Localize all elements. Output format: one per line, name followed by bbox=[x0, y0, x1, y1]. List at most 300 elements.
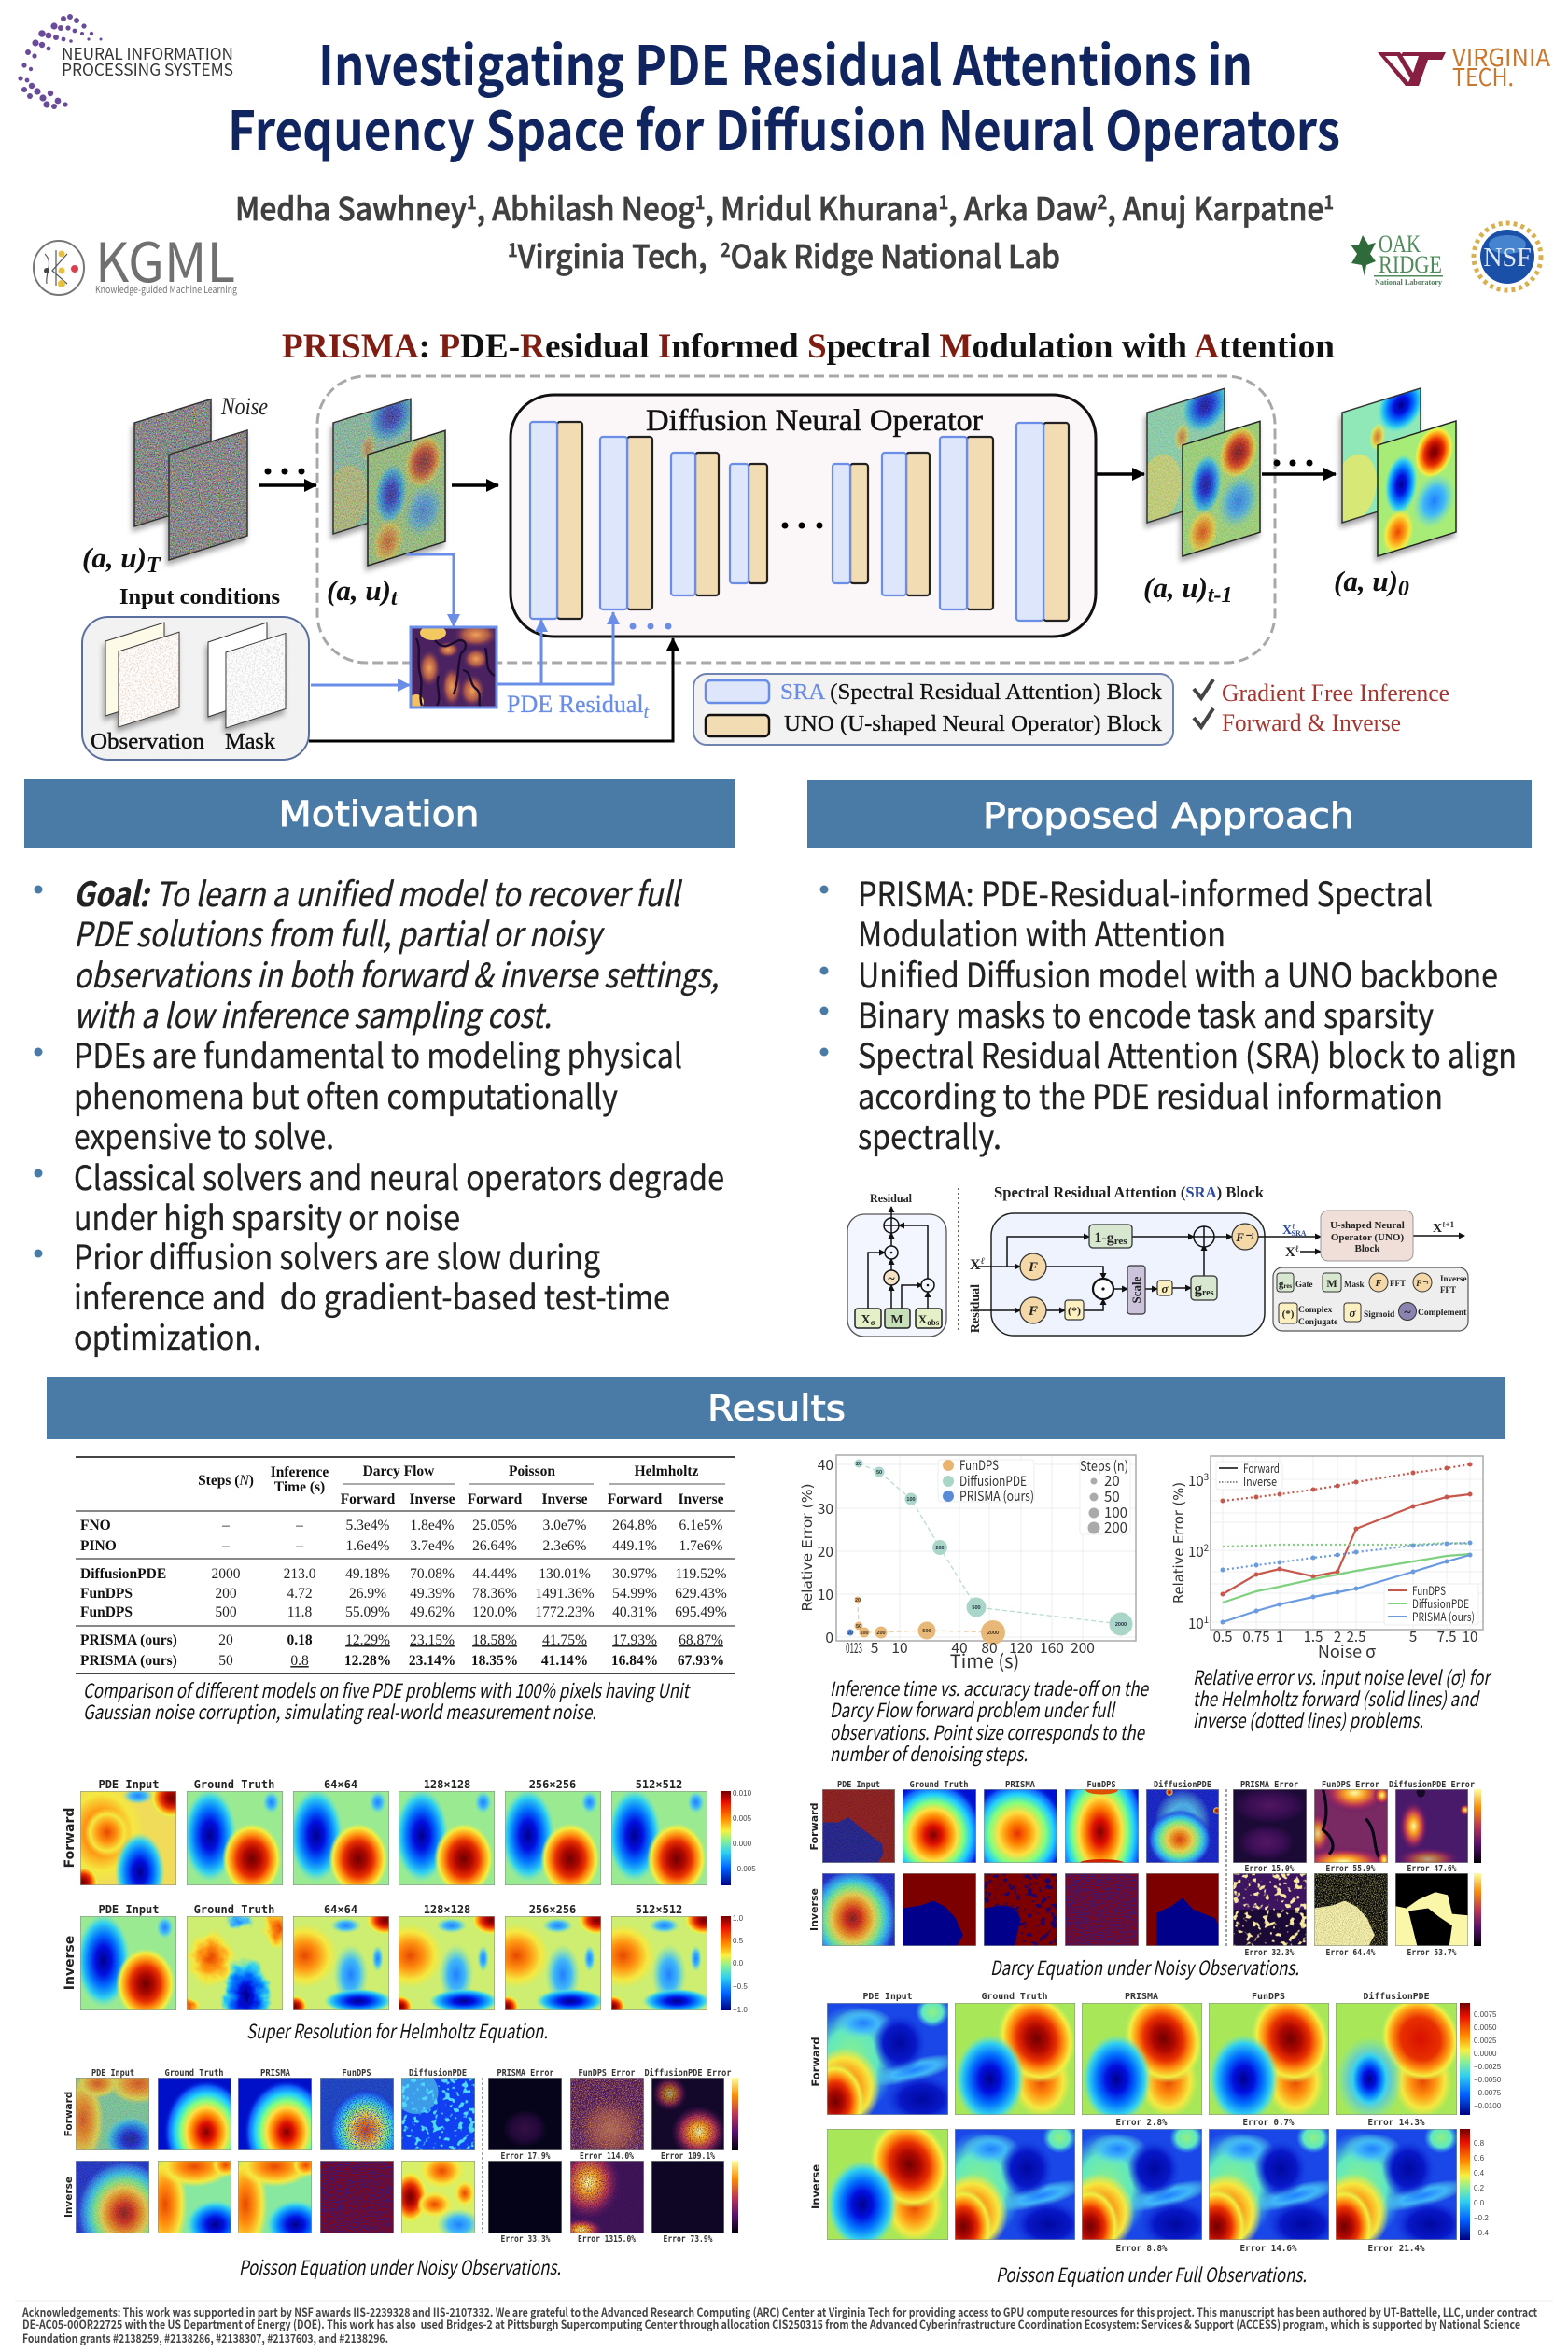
series: FunDPS: 500 bbox=[922, 1629, 931, 1634]
panel: input conditions bbox=[82, 617, 309, 760]
colorbars bbox=[1460, 2003, 1502, 2240]
logo: Oak Ridge National Laboratory: OAK bbox=[1379, 231, 1421, 258]
legend: steps bbox=[1080, 1456, 1130, 1537]
affiliations: 1 bbox=[508, 235, 518, 262]
column titles: Ground Truth bbox=[164, 2068, 224, 2079]
dashed sampling loop bbox=[317, 376, 1275, 663]
legend: SRA symbols: Complement bbox=[1418, 1309, 1467, 1318]
arrow: xt to operator bbox=[452, 483, 498, 487]
checklist: features bbox=[1194, 679, 1449, 736]
row: PINO: 26.64% bbox=[472, 1538, 517, 1554]
label: (a,u)0: (a, u) bbox=[1334, 565, 1398, 597]
panel: SRA block: 1-g bbox=[1094, 1230, 1114, 1246]
row: PINO: 3.7e4% bbox=[411, 1538, 455, 1554]
text: proposed approach bullets: spectrally. bbox=[858, 1111, 1001, 1159]
label: (a,u)T: T bbox=[147, 553, 161, 578]
acknowledgements: Foundation grants #2138259, #2138286, #2138307, #2137603, and #2138296. bbox=[22, 2329, 388, 2346]
sheets: mask bbox=[208, 623, 286, 728]
legend: SRA symbols: Mask bbox=[1344, 1280, 1365, 1289]
text: motivation bullets: Prior diffusion solvers are slow during bbox=[74, 1231, 600, 1280]
text: motivation bullets: under high sparsity or noise bbox=[74, 1192, 460, 1240]
arrow: noise to xt bbox=[259, 469, 316, 485]
axis ticks: 0.5 bbox=[1213, 1627, 1232, 1646]
legend: SRA symbols: ~ bbox=[1404, 1306, 1411, 1320]
axis tick labels: 200 bbox=[1071, 1637, 1095, 1658]
error labels: Error 2.8% bbox=[1116, 2118, 1167, 2128]
column titles: PDE Input bbox=[862, 1992, 913, 2002]
axis ticks: 10 bbox=[1188, 1614, 1204, 1633]
series: DiffusionPDE: 200 bbox=[935, 1546, 945, 1551]
label: PDE Residual t: PDE Residual bbox=[507, 691, 644, 718]
legend: methods: DiffusionPDE bbox=[1412, 1594, 1469, 1612]
panel: residual computation: Residual bbox=[870, 1191, 912, 1205]
table: model comparison bbox=[76, 1457, 735, 1673]
row: FNO: 6.1e5% bbox=[679, 1518, 723, 1533]
column titles: PRISMA Error bbox=[1240, 1780, 1298, 1790]
noise sheets bbox=[134, 399, 247, 560]
panel: SRA block bbox=[978, 1213, 1265, 1336]
colorbars: −0.005 bbox=[733, 1865, 756, 1873]
heading: PRISMA full name: PRISMA: PDE-Residual Informed Spectral Modulation with Attention bbox=[282, 327, 1335, 365]
heatmaps inverse bbox=[807, 1868, 1468, 1969]
column titles bbox=[862, 1991, 1430, 2002]
colorbars: −0.0100 bbox=[1474, 2102, 1502, 2110]
label: (a,u)t-1: (a, u) bbox=[1143, 571, 1208, 604]
row: DiffusionPDE: 70.08% bbox=[410, 1566, 455, 1582]
panel: residual computation: X bbox=[918, 1312, 927, 1326]
legend: methods: DiffusionPDE bbox=[959, 1471, 1027, 1491]
legend: SRA symbols: σ bbox=[1349, 1306, 1356, 1320]
table header: Steps (N) bbox=[198, 1473, 254, 1489]
label: PDE Residual t: t bbox=[644, 703, 650, 722]
column titles: DiffusionPDE Error bbox=[1389, 1779, 1475, 1790]
series: FunDPS: 100 bbox=[860, 1631, 869, 1636]
logo: NeurIPS: NEURAL INFORMATION bbox=[62, 42, 233, 65]
caption: noise level: the Helmholtz forward (solid lines) and bbox=[1193, 1685, 1480, 1713]
axis tick labels: 10 bbox=[891, 1637, 908, 1658]
caption: inference trade-off bbox=[830, 1674, 1150, 1768]
panel: SRA block: g bbox=[1194, 1280, 1202, 1297]
sheets: noisy state t bbox=[324, 382, 445, 570]
row: PRISMA 20 bbox=[80, 1632, 723, 1648]
colorbars bbox=[1474, 1789, 1481, 1946]
legend: methods: FunDPS bbox=[1412, 1581, 1446, 1599]
axis ticks: 1 bbox=[1276, 1627, 1283, 1646]
axis label: time: Time (s) bbox=[950, 1646, 1019, 1673]
column titles: 256×256 bbox=[529, 1903, 576, 1916]
authors: , Abhilash Neog bbox=[477, 184, 695, 230]
column titles: FunDPS bbox=[1086, 1780, 1116, 1790]
colorbars: 0.000 bbox=[733, 1840, 752, 1848]
caption: inference trade-off: number of denoising steps. bbox=[830, 1740, 1028, 1768]
legend: block types bbox=[693, 674, 1173, 745]
text: proposed approach bullets: Binary masks to encode task and sparsity bbox=[858, 989, 1434, 1038]
axis ticks: 10 bbox=[1188, 1542, 1204, 1561]
row: DiffusionPDE bbox=[80, 1566, 727, 1582]
row: FunDPS 200: 54.99% bbox=[612, 1586, 657, 1602]
text: motivation bullets: PDE solutions from full, partial or noisy bbox=[74, 908, 606, 957]
table header: Forward bbox=[341, 1491, 396, 1507]
text: motivation bullets: inference and do gradient-based test-time bbox=[74, 1271, 670, 1320]
panel: UNO block: ℓ bbox=[1292, 1222, 1295, 1231]
row: DiffusionPDE: 44.44% bbox=[472, 1566, 517, 1582]
legend: line style: Forward bbox=[1243, 1459, 1280, 1477]
acknowledgements bbox=[15, 2301, 1553, 2346]
row: FunDPS 200: 26.9% bbox=[349, 1586, 386, 1602]
table header bbox=[198, 1463, 724, 1507]
sheets: observation bbox=[105, 623, 179, 727]
caption: noise level: inverse (dotted lines) problems. bbox=[1193, 1706, 1423, 1734]
caption: Poisson noisy: Poisson Equation under Noisy Observations. bbox=[239, 2253, 561, 2281]
panel: SRA block: Scale bbox=[1129, 1276, 1143, 1303]
series: PRISMA bbox=[847, 1630, 853, 1636]
table header: Forward bbox=[608, 1491, 663, 1507]
row: DiffusionPDE: 130.01% bbox=[539, 1566, 591, 1582]
axis tick labels: 120 bbox=[1009, 1637, 1033, 1658]
text: motivation bullets: PDEs are fundamental to modeling physical bbox=[74, 1029, 682, 1078]
text: motivation bullets: with a low inference sampling cost. bbox=[74, 989, 552, 1038]
colorbars: 0.6 bbox=[1474, 2154, 1485, 2163]
column titles bbox=[91, 2067, 732, 2079]
panel: UNO block: X bbox=[1433, 1222, 1442, 1236]
axis tick labels: 40 bbox=[951, 1637, 968, 1658]
panel: residual computation: ~ bbox=[888, 1272, 895, 1286]
row: FunDPS 500: 500 bbox=[215, 1604, 237, 1620]
label: (a,u)t: (a, u) bbox=[327, 574, 391, 607]
axis ticks: 2 bbox=[1204, 1540, 1210, 1554]
text: motivation bullets: observations in both forward & inverse settings, bbox=[74, 949, 719, 998]
label: Input conditions: Input conditions bbox=[119, 585, 280, 609]
colorbars: 0.010 bbox=[733, 1789, 752, 1798]
row: PRISMA 50: 0.8 bbox=[290, 1653, 309, 1669]
column titles: 128×128 bbox=[424, 1778, 470, 1791]
logo: NeurIPS: PROCESSING SYSTEMS bbox=[62, 58, 233, 81]
series: DiffusionPDE: 500 bbox=[972, 1605, 981, 1611]
legend: methods: FunDPS bbox=[959, 1455, 999, 1475]
column titles: 512×512 bbox=[636, 1903, 682, 1916]
authors: 1 bbox=[467, 188, 477, 215]
chart: error vs noise bbox=[1170, 1456, 1483, 1663]
series: FunDPS: 2000 bbox=[987, 1631, 999, 1636]
table header: Time (s) bbox=[274, 1479, 325, 1495]
colorbars bbox=[721, 1789, 756, 2014]
table header: Inverse bbox=[409, 1491, 455, 1507]
column titles bbox=[98, 1778, 682, 1916]
row: FunDPS 500: 120.0% bbox=[472, 1604, 517, 1620]
row: FNO: 25.05% bbox=[472, 1518, 517, 1533]
row: DiffusionPDE: 119.52% bbox=[676, 1566, 727, 1582]
text: proposed approach bullets: Unified Diffusion model with a UNO backbone bbox=[858, 949, 1498, 998]
colorbars: 0.8 bbox=[1474, 2139, 1485, 2148]
row labels: Forward bbox=[809, 2037, 822, 2087]
axis label: relative error: Relative Error (%) bbox=[799, 1484, 816, 1611]
legend: line style bbox=[1216, 1459, 1282, 1490]
table header: Inverse bbox=[678, 1491, 724, 1507]
row: FunDPS 200: 1491.36% bbox=[535, 1586, 595, 1602]
row: FunDPS 500: 695.49% bbox=[675, 1604, 727, 1620]
row: FunDPS 500: 11.8 bbox=[287, 1604, 313, 1620]
column titles: DiffusionPDE bbox=[409, 2067, 467, 2079]
row: PINO: 449.1% bbox=[612, 1538, 657, 1554]
row labels: Inverse bbox=[63, 2177, 75, 2218]
legend: steps: 50 bbox=[1104, 1487, 1120, 1506]
text: motivation bullets bbox=[34, 868, 724, 1360]
row: FNO: FNO bbox=[80, 1518, 111, 1533]
column titles: 64×64 bbox=[324, 1903, 357, 1916]
axis tick labels: 5 bbox=[871, 1637, 878, 1658]
authors: , Mridul Khurana bbox=[705, 184, 939, 230]
heatmaps forward bbox=[822, 1758, 1471, 1906]
row: PRISMA 20: 41.75% bbox=[542, 1632, 587, 1648]
legend: SRA symbols: M bbox=[1326, 1277, 1337, 1290]
legend: SRA symbols: res bbox=[1283, 1282, 1292, 1290]
series: PRISMA bbox=[1221, 1540, 1473, 1624]
series: FunDPS: 50 bbox=[856, 1624, 861, 1630]
axis ticks: 0.75 bbox=[1242, 1627, 1270, 1646]
panel: residual computation bbox=[847, 1191, 946, 1337]
series: FunDPS bbox=[855, 1596, 1005, 1645]
axis ticks: 10 bbox=[1188, 1471, 1204, 1491]
text: motivation bullets: Goal: To learn a unified model to recover full bbox=[74, 868, 682, 917]
caption: Darcy: Darcy Equation under Noisy Observations. bbox=[990, 1953, 1299, 1981]
label: Noise: Noise bbox=[220, 393, 268, 420]
error labels: Error 109.1% bbox=[661, 2151, 715, 2162]
row: PRISMA 20: PRISMA (ours) bbox=[80, 1632, 177, 1648]
authors: 1 bbox=[939, 188, 948, 215]
colorbars: −0.0050 bbox=[1474, 2076, 1502, 2084]
caption: noise level bbox=[1193, 1663, 1492, 1734]
column titles: PDE Input bbox=[837, 1780, 880, 1790]
text: motivation bullets: phenomena but often computationally bbox=[74, 1071, 618, 1119]
axis ticks: 2.5 bbox=[1347, 1627, 1365, 1646]
authors: Medha Sawhney bbox=[235, 184, 483, 230]
panel: residual computation: σ bbox=[871, 1318, 875, 1327]
legend: steps: 200 bbox=[1104, 1518, 1127, 1537]
row: FunDPS 500: 40.31% bbox=[612, 1604, 657, 1620]
row: PINO: – bbox=[295, 1538, 303, 1554]
row: DiffusionPDE: 49.18% bbox=[345, 1566, 390, 1582]
series: FunDPS: 20 bbox=[855, 1598, 861, 1603]
column titles: Ground Truth bbox=[194, 1903, 274, 1916]
row: PRISMA 20: 23.15% bbox=[410, 1632, 455, 1648]
title bbox=[228, 22, 1340, 166]
panel: UNO block: ℓ+1 bbox=[1442, 1220, 1455, 1229]
row: PRISMA 20: 18.58% bbox=[472, 1632, 517, 1648]
row: FunDPS 500: 49.62% bbox=[410, 1604, 455, 1620]
colorbars: 0.0000 bbox=[1474, 2050, 1497, 2058]
text: proposed approach bullets: according to the PDE residual information bbox=[858, 1071, 1443, 1119]
panel: diffusion neural operator bbox=[511, 395, 1096, 637]
panel: residual computation: obs bbox=[927, 1318, 940, 1327]
text: proposed approach bullets bbox=[819, 868, 1517, 1159]
colorbars: 0.2 bbox=[1474, 2184, 1485, 2192]
error labels: Error 0.7% bbox=[1243, 2118, 1294, 2128]
row: FNO: 5.3e4% bbox=[346, 1518, 390, 1533]
header: Proposed Approach: Proposed Approach bbox=[983, 796, 1354, 836]
row: PINO: – bbox=[221, 1538, 230, 1554]
logo: Oak Ridge National Laboratory: National Laboratory bbox=[1375, 278, 1442, 287]
authors: 1 bbox=[695, 188, 705, 215]
row: DiffusionPDE: 30.97% bbox=[612, 1566, 657, 1582]
table header: Darcy Flow bbox=[363, 1463, 435, 1479]
axis label: noise: Noise σ bbox=[1318, 1639, 1376, 1663]
legend: line style: Inverse bbox=[1243, 1472, 1277, 1490]
axis ticks: 1.5 bbox=[1304, 1627, 1323, 1646]
header: Proposed Approach bbox=[807, 780, 1532, 848]
colorbars: 0.0050 bbox=[1474, 2023, 1497, 2032]
row: FunDPS 200 bbox=[80, 1586, 727, 1602]
heatmaps inverse bbox=[77, 1905, 722, 2033]
legend: SRA symbols: Gate bbox=[1295, 1280, 1312, 1289]
row: PRISMA 20: 68.87% bbox=[679, 1632, 723, 1648]
row: PRISMA 20: 0.18 bbox=[287, 1632, 313, 1648]
panel: UNO block: Operator (UNO) bbox=[1331, 1232, 1404, 1243]
text: motivation bullets: Classical solvers and neural operators degrade bbox=[74, 1152, 724, 1200]
colorbars: 0.4 bbox=[1474, 2169, 1485, 2177]
caption: table bbox=[83, 1676, 691, 1726]
label: Residual input: Residual bbox=[969, 1284, 983, 1333]
row labels: Inverse bbox=[808, 1888, 820, 1931]
series: DiffusionPDE: 100 bbox=[906, 1497, 916, 1503]
row: FunDPS 200: 49.39% bbox=[410, 1586, 455, 1602]
header: Results bbox=[47, 1377, 1505, 1439]
affiliations: 2 bbox=[721, 235, 731, 262]
legend: methods bbox=[1384, 1581, 1478, 1625]
legend: methods: PRISMA (ours) bbox=[959, 1486, 1034, 1505]
panel: UNO block: ℓ bbox=[1295, 1244, 1299, 1254]
row: FNO: 1.8e4% bbox=[411, 1518, 455, 1533]
row: DiffusionPDE: 2000 bbox=[211, 1566, 241, 1582]
legend: SRA symbols: (*) bbox=[1282, 1309, 1295, 1320]
column titles: FunDPS Error bbox=[579, 2068, 635, 2079]
row labels: Forward bbox=[63, 1808, 77, 1868]
error labels: Error 73.9% bbox=[663, 2234, 713, 2245]
row: PRISMA 50: 41.14% bbox=[541, 1653, 588, 1669]
text: motivation bullets: optimization. bbox=[74, 1311, 261, 1360]
text: proposed approach bullets: Modulation with Attention bbox=[858, 908, 1225, 957]
error labels: Error 33.3% bbox=[500, 2234, 551, 2245]
arrow: operator to x t-1 bbox=[1097, 472, 1144, 476]
heatmaps forward bbox=[63, 2063, 726, 2185]
text: proposed approach bullets: PRISMA: PDE-Residual-informed Spectral bbox=[858, 868, 1433, 917]
error labels: Error 21.4% bbox=[1368, 2244, 1424, 2254]
row: PINO bbox=[80, 1538, 723, 1554]
title: Investigating PDE Residual Attentions in bbox=[318, 22, 1253, 101]
legend: block types: SRA (Spectral Residual Attention) Block bbox=[780, 679, 1163, 705]
row: FNO bbox=[80, 1518, 723, 1533]
table header: Inference bbox=[271, 1464, 329, 1480]
error labels: Error 14.6% bbox=[1239, 2244, 1297, 2254]
row: DiffusionPDE: DiffusionPDE bbox=[80, 1566, 166, 1582]
colorbars: −0.0075 bbox=[1474, 2089, 1502, 2097]
image: residual map bbox=[409, 622, 498, 709]
caption: Poisson full: Poisson Equation under Full Observations. bbox=[996, 2261, 1307, 2289]
colorbars: −1.0 bbox=[733, 2006, 748, 2014]
series: FunDPS bbox=[1221, 1462, 1473, 1596]
row: FunDPS 200: 629.43% bbox=[675, 1586, 727, 1602]
row labels: Inverse bbox=[809, 2164, 822, 2209]
table header: Forward bbox=[468, 1491, 523, 1507]
error labels: Error 53.7% bbox=[1407, 1948, 1456, 1958]
row: PRISMA 50: 23.14% bbox=[409, 1653, 455, 1669]
header: Results: Results bbox=[707, 1389, 846, 1429]
series: PRISMA: 20 bbox=[847, 1631, 853, 1636]
dashed separator bbox=[1225, 1789, 1227, 1946]
arrow: t-1 to 0 bbox=[1262, 459, 1336, 474]
error labels: Error 17.9% bbox=[500, 2151, 551, 2162]
legend: SRA symbols: F bbox=[1375, 1279, 1382, 1289]
axis tick labels: 0 bbox=[825, 1627, 833, 1647]
row labels: Inverse bbox=[63, 1936, 77, 1990]
panel: UNO block: X bbox=[1285, 1245, 1295, 1260]
row: FunDPS 200: 78.36% bbox=[472, 1586, 517, 1602]
heatmaps forward bbox=[806, 1987, 1469, 2139]
row: FNO: 3.0e7% bbox=[543, 1518, 587, 1533]
chart: inference time vs error bbox=[799, 1454, 1136, 1673]
legend: steps: 20 bbox=[1104, 1471, 1120, 1491]
legend: methods bbox=[938, 1455, 1034, 1505]
figure: Poisson full observations bbox=[806, 1987, 1502, 2264]
heatmaps inverse bbox=[76, 2145, 724, 2267]
error labels: Error 14.3% bbox=[1368, 2118, 1424, 2128]
panel: UNO block: SRA bbox=[1292, 1229, 1307, 1238]
panel: SRA block: F⁻¹ bbox=[1235, 1230, 1254, 1244]
row: FNO: 264.8% bbox=[612, 1518, 657, 1533]
logo: NSF bbox=[1474, 223, 1541, 290]
row: PRISMA 20: 17.93% bbox=[612, 1632, 657, 1648]
error labels: Error 8.8% bbox=[1116, 2244, 1167, 2254]
colorbars: 0.0075 bbox=[1474, 2010, 1497, 2019]
panel: UNO block: U-shaped Neural bbox=[1330, 1220, 1405, 1231]
column titles: FunDPS bbox=[342, 2068, 371, 2079]
table header: Poisson bbox=[509, 1463, 555, 1479]
row labels bbox=[63, 2092, 75, 2218]
axis ticks: 3 bbox=[1204, 1469, 1209, 1483]
legend: SRA symbols: FFT bbox=[1390, 1279, 1406, 1288]
column titles: PDE Input bbox=[91, 2068, 134, 2079]
heatmaps forward bbox=[59, 1777, 707, 1911]
row: FunDPS 500: FunDPS bbox=[80, 1604, 133, 1620]
series: DiffusionPDE: 20 bbox=[856, 1462, 861, 1467]
logo: Oak Ridge National Laboratory: RIDGE bbox=[1379, 251, 1442, 278]
series: DiffusionPDE: 2000 bbox=[1115, 1622, 1127, 1628]
panel: SRA block: (*) bbox=[1068, 1304, 1081, 1317]
logo: Virginia Tech: VIRGINIA bbox=[1452, 39, 1550, 74]
error labels: Error 1315.0% bbox=[578, 2234, 636, 2245]
column titles: PDE Input bbox=[98, 1778, 160, 1791]
legend: SRA symbols: F⁻¹ bbox=[1415, 1279, 1429, 1288]
panel: residual computation: M bbox=[890, 1313, 903, 1327]
column titles: 256×256 bbox=[529, 1778, 576, 1791]
colorbars: −0.4 bbox=[1474, 2229, 1489, 2237]
row: FunDPS 500 bbox=[80, 1604, 727, 1620]
legend: SRA symbols: Conjugate bbox=[1298, 1318, 1337, 1327]
logo: KGML bbox=[34, 219, 237, 298]
caption: table: Gaussian noise corruption, simulating real-world measurement noise. bbox=[83, 1698, 596, 1726]
label: (a,u)t-1: t-1 bbox=[1208, 583, 1233, 608]
column titles: FunDPS bbox=[1252, 1992, 1285, 2002]
logo: NeurIPS bbox=[18, 14, 233, 109]
row: PINO: 2.3e6% bbox=[543, 1538, 587, 1554]
row: PRISMA 50: 67.93% bbox=[678, 1653, 724, 1669]
logo: KGML: KGML bbox=[95, 219, 235, 298]
colorbars: 0.5 bbox=[733, 1937, 744, 1945]
column titles: 512×512 bbox=[636, 1778, 682, 1791]
row: PINO: PINO bbox=[80, 1538, 117, 1554]
column titles: Ground Truth bbox=[194, 1778, 274, 1791]
row: PINO: 1.7e6% bbox=[679, 1538, 723, 1554]
authors: 2 bbox=[1098, 188, 1107, 215]
